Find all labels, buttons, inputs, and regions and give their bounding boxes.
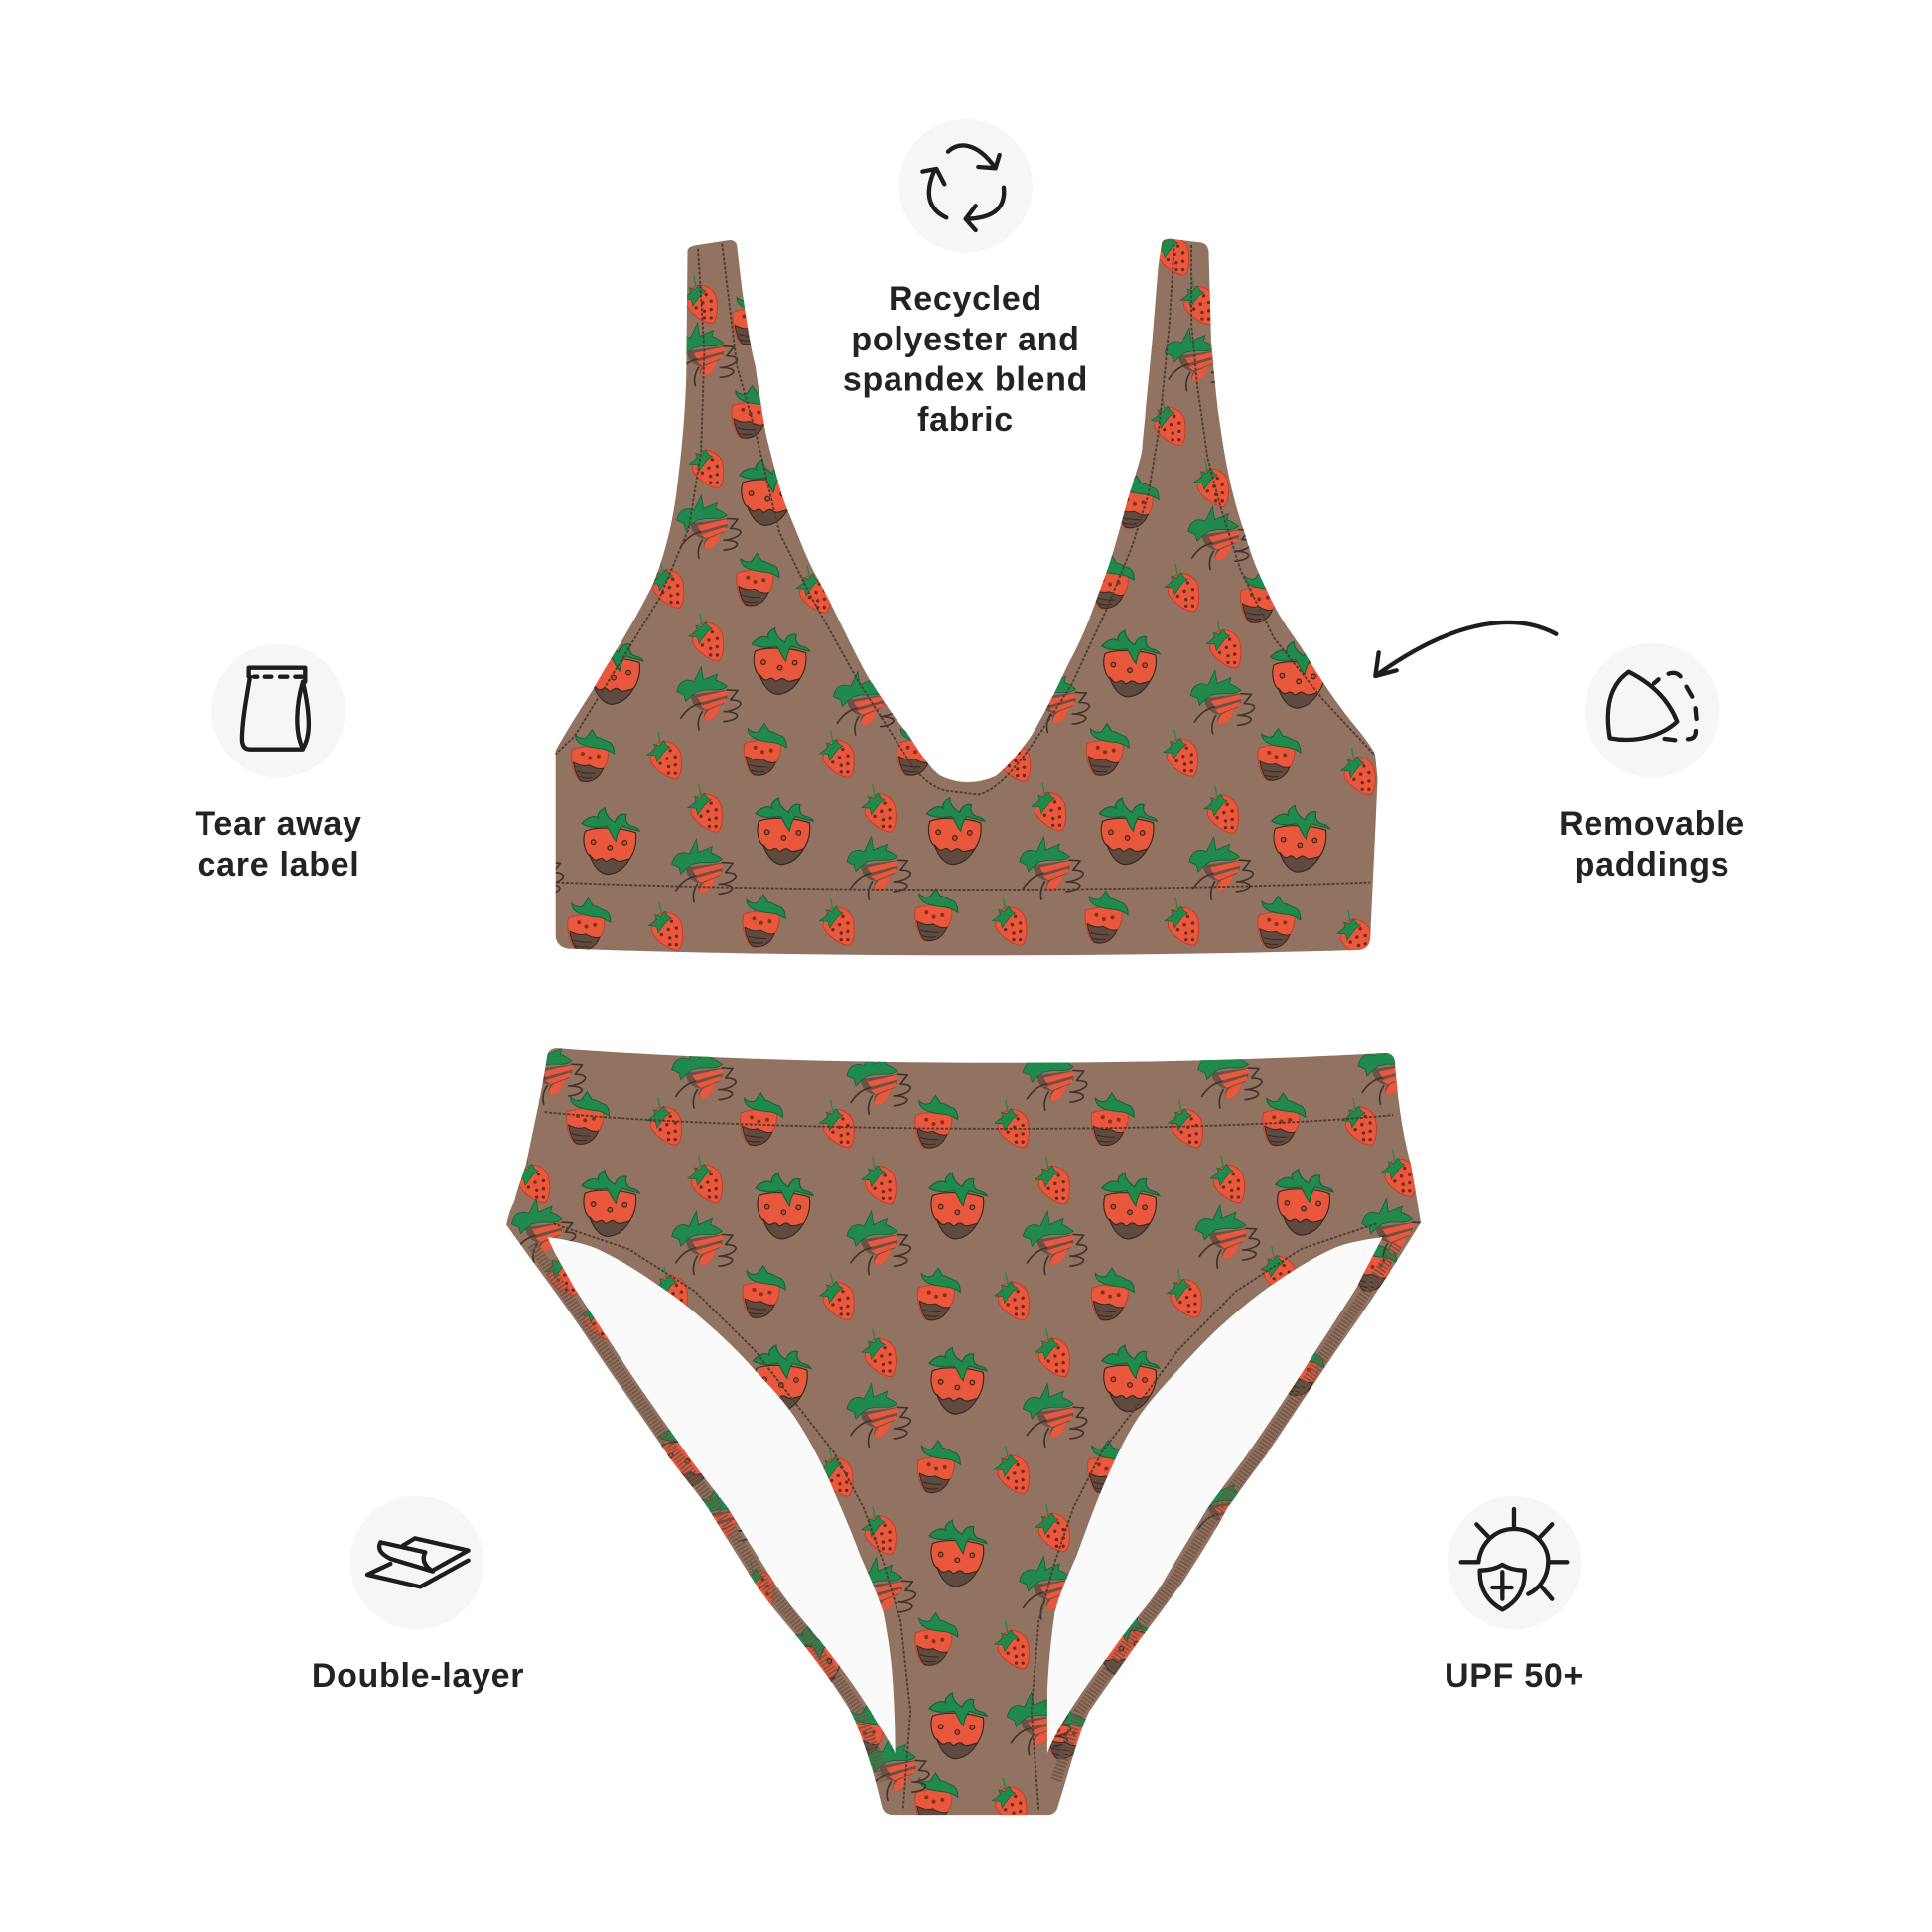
- icon: sun with shield: [1448, 1496, 1581, 1629]
- text: tear away: care label: [198, 846, 359, 884]
- text: recycled polyester: polyester and: [851, 321, 1080, 358]
- arrow: to paddings: [1375, 622, 1556, 676]
- feature: tear away care label: [195, 644, 362, 884]
- strawberry pattern: top: [499, 227, 1375, 958]
- text: tear away: [195, 805, 362, 884]
- icon: recycle arrows: [898, 119, 1033, 253]
- leg bands: [532, 1244, 1397, 1780]
- text: recycled polyester: Recycled: [889, 280, 1042, 318]
- white lining: left: [548, 1237, 896, 1753]
- text: removable paddings: Removable: [1559, 805, 1745, 843]
- icon: label bag: [211, 644, 345, 777]
- feature: removable paddings: [1559, 643, 1745, 884]
- feature: recycled fabric: [843, 119, 1088, 439]
- text: recycled polyester: spandex blend: [843, 361, 1088, 399]
- text: recycled polyester: [843, 280, 1088, 439]
- text: UPF 50+: UPF 50+: [1445, 1657, 1584, 1695]
- feature: UPF 50+: [1445, 1496, 1584, 1695]
- text: tear away: Tear away: [195, 805, 362, 843]
- feature: double-layer: [312, 1496, 524, 1695]
- icon: padding: [1585, 643, 1720, 777]
- icon: layers: [350, 1496, 483, 1629]
- strawberry pattern: bottom: [511, 1041, 1426, 1826]
- bikini top: [499, 227, 1378, 958]
- stitching: top: [556, 244, 1374, 890]
- text: removable paddings: [1559, 805, 1745, 884]
- bikini bottom: [506, 1041, 1426, 1826]
- text: removable paddings: paddings: [1575, 846, 1729, 884]
- white lining: right: [1047, 1237, 1382, 1753]
- stitching: bottom: [545, 1112, 1393, 1810]
- text: double-layer: Double-layer: [312, 1657, 524, 1695]
- text: recycled polyester: fabric: [917, 401, 1014, 439]
